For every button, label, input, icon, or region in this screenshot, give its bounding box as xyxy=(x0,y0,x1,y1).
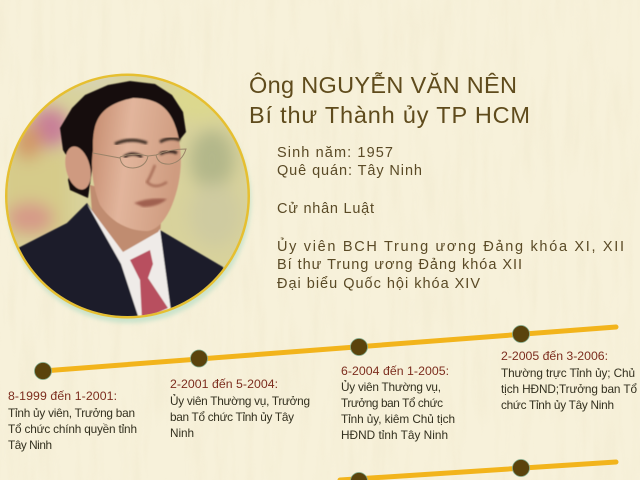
timeline dot 4 xyxy=(512,326,530,342)
eyes xyxy=(124,151,177,157)
eyebrows xyxy=(115,138,180,144)
shirt xyxy=(87,204,171,322)
timeline entry 2-2001: Ninh xyxy=(170,426,194,440)
timeline entry 8-1999: Tổ chức chính quyền tỉnh xyxy=(8,422,137,436)
timeline entry 8-1999: Tỉnh ủy viên, Trưởng ban xyxy=(8,406,135,420)
timeline dot 2 xyxy=(190,350,208,367)
title: Bí thư Thành ủy TP HCM xyxy=(249,102,530,128)
timeline entry 8-1999: 8-1999 đến 1-2001: xyxy=(8,389,117,403)
timeline dot 3 xyxy=(350,338,368,356)
person xyxy=(19,80,224,316)
personal details xyxy=(277,145,624,292)
timeline entry 8-1999 xyxy=(8,389,137,452)
nose shadow xyxy=(147,165,167,186)
timeline entry 6-2004: Tỉnh ủy, kiêm Chủ tịch xyxy=(341,412,455,426)
personal details: Đại biểu Quốc hội khóa XIV xyxy=(277,276,480,292)
neck xyxy=(89,184,162,252)
personal details: Cử nhân Luật xyxy=(277,201,374,217)
personal details: Sinh năm: 1957 xyxy=(277,145,393,161)
glasses xyxy=(93,149,186,168)
hair xyxy=(60,81,186,198)
timeline entry 6-2004: Trưởng ban Tổ chức xyxy=(341,396,443,410)
ear xyxy=(64,146,92,190)
photo contents xyxy=(8,76,248,316)
portrait photo in circular frame xyxy=(5,74,253,325)
timeline entry 2-2005: 2-2005 đến 3-2006: xyxy=(501,349,608,363)
personal details: Ủy viên BCH Trung ương Đảng khóa XI, XII xyxy=(277,237,624,255)
personal details: Bí thư Trung ương Đảng khóa XII xyxy=(277,257,522,273)
timeline entry 6-2004: 6-2004 đến 1-2005: xyxy=(341,364,449,378)
timeline entry 2-2005: chức Tỉnh ủy Tây Ninh xyxy=(501,398,614,412)
timeline entry 6-2004 xyxy=(341,364,455,442)
timeline entry 2-2001: Ủy viên Thường vụ, Trưởng xyxy=(170,394,310,408)
frame glow xyxy=(7,79,251,323)
timeline entry 2-2005: tịch HĐND;Trưởng ban Tổ xyxy=(501,382,637,396)
timeline entry 2-2001 xyxy=(170,377,310,440)
timeline entry 8-1999: Tây Ninh xyxy=(8,438,52,452)
suit xyxy=(19,202,224,316)
timeline line 2 xyxy=(340,460,616,480)
timeline entry 2-2001: 2-2001 đến 5-2004: xyxy=(170,377,278,391)
title xyxy=(249,70,530,128)
gold ring xyxy=(5,74,250,318)
timeline dot 1 xyxy=(34,362,52,380)
timeline entry 2-2005 xyxy=(501,349,637,412)
timeline entry 6-2004: Ủy viên Thường vụ, xyxy=(341,380,441,394)
timeline entry 2-2005: Thường trực Tỉnh ủy; Chủ xyxy=(501,366,635,380)
timeline dot 6 xyxy=(512,460,530,476)
timeline line 1 xyxy=(34,326,616,380)
face xyxy=(92,98,181,231)
timeline entry 6-2004: HĐND tỉnh Tây Ninh xyxy=(341,428,448,442)
timeline dot 5 xyxy=(350,472,368,480)
tie xyxy=(130,250,168,320)
title: Ông NGUYỄN VĂN NÊN xyxy=(249,70,517,98)
timeline entry 2-2001: ban Tổ chức Tỉnh ủy Tây xyxy=(170,410,294,424)
personal details: Quê quán: Tây Ninh xyxy=(277,163,422,179)
mouth xyxy=(134,198,167,207)
